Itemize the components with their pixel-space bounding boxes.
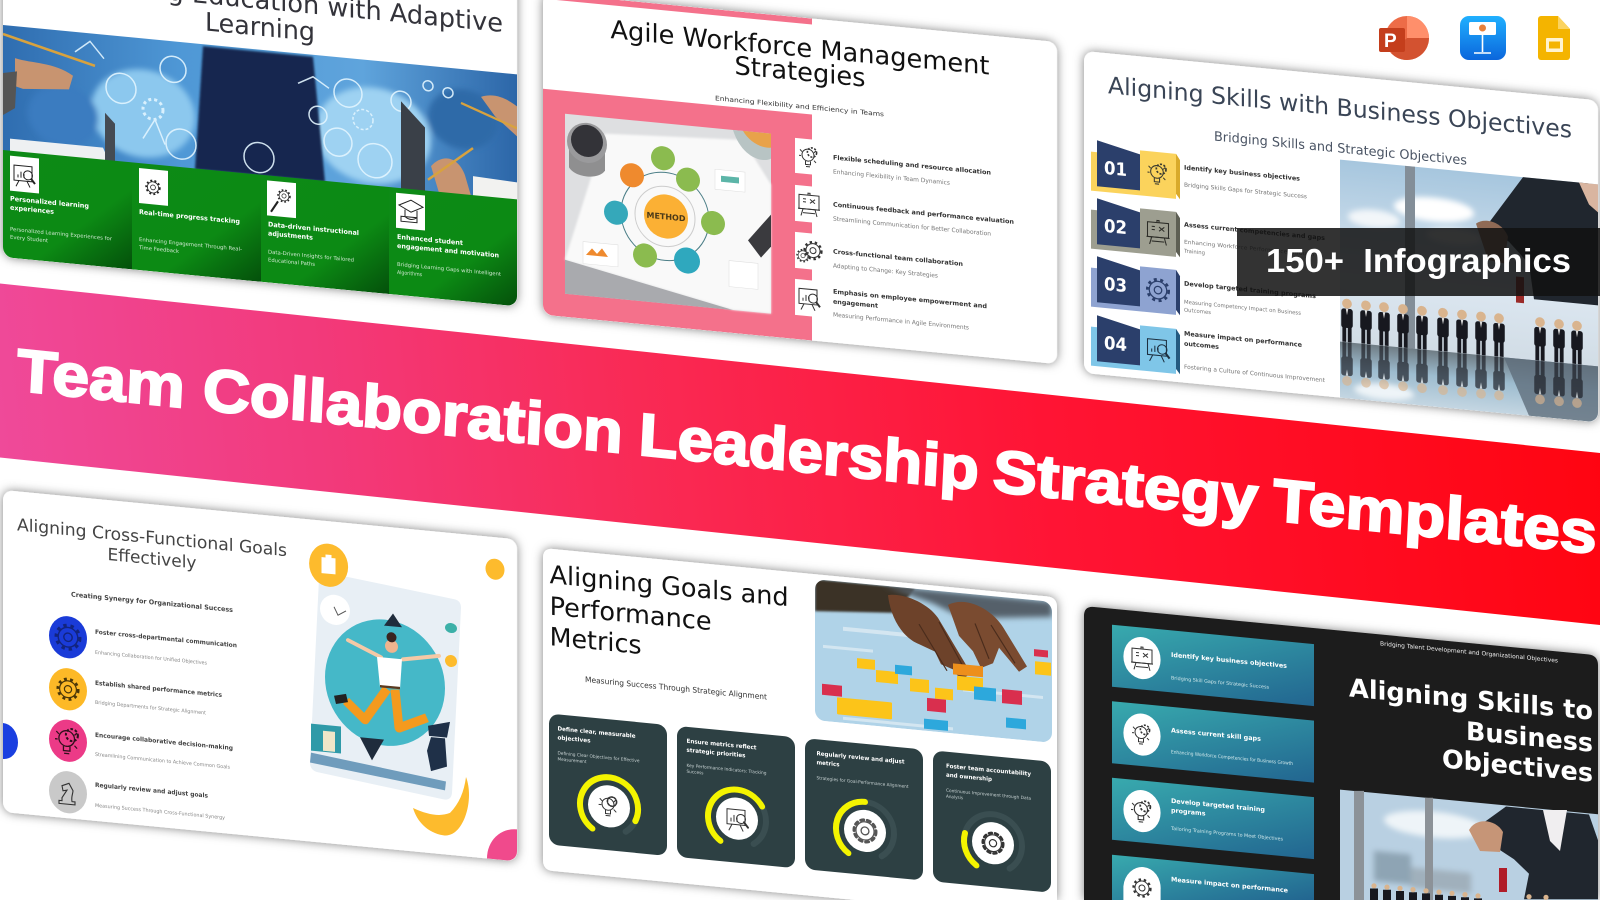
list item: flexible scheduling: Enhancing Flexibility in Team Dynamics <box>833 169 950 187</box>
column: personalized learning <box>3 150 132 269</box>
card: metrics reflect priorities: Ensure metrics reflect <box>686 739 757 752</box>
column: data-driven instructional adjustments: Data-Driven Insights for Tailored <box>268 249 354 264</box>
panel: aligning cross-functional goals slide <box>0 489 547 896</box>
decoration: blue half circle <box>3 723 18 759</box>
card: review metrics: Regularly review and adjust <box>817 751 905 766</box>
card: define objectives: Define clear, measurable <box>558 726 636 740</box>
card: metrics reflect priorities: Success <box>686 769 704 776</box>
slide title: Aligning Skills to <box>1349 673 1593 727</box>
slide title: Effectively <box>107 545 196 574</box>
list item: continuous feedback: Continuous feedback and performance evaluation <box>833 202 1014 226</box>
list item: shared metrics: Bridging Departments for Strategic Alignment <box>95 700 206 716</box>
strip: measure impact <box>1112 855 1314 900</box>
icon: PowerPoint: P <box>1384 31 1397 52</box>
slide title: Strategies <box>734 51 866 94</box>
column: data-driven instructional adjustments <box>261 175 389 294</box>
icon: yellow briefcase badge <box>309 542 348 589</box>
subtitle: Bridging Skills and Strategic Objectives <box>1214 130 1467 169</box>
list item 04 <box>1091 315 1326 388</box>
list item: employee empowerment: Emphasis on employee empowerment and <box>833 289 987 310</box>
photo: hands and holographic learning icons <box>3 25 517 200</box>
card: metrics reflect priorities: strategic priorities <box>686 748 746 759</box>
list item: foster communication: Enhancing Collaboration for Unified Objectives <box>95 650 207 667</box>
column: personalized learning: experiences <box>10 204 54 216</box>
illustration: jumping woman <box>310 571 461 801</box>
panel: aligning skills to business objectives dark slide <box>1084 607 1598 900</box>
subtitle: Enhancing Flexibility and Efficiency in Teams <box>715 94 885 119</box>
main title: Team <box>15 337 187 421</box>
icon: Keynote <box>1460 16 1506 60</box>
list item: collaborative decisions: Streamlining Communication to Achieve Common Goals <box>95 752 230 771</box>
list item: flexible scheduling: Flexible scheduling and resource allocation <box>833 155 991 177</box>
main title: Templates <box>1271 466 1599 567</box>
list item 01: 01 <box>1104 158 1127 181</box>
strip: develop training: Tailoring Training Programs to Meet Objectives <box>1170 826 1283 843</box>
list item 03: Develop targeted training programs <box>1184 280 1316 300</box>
list item: employee empowerment <box>795 279 987 333</box>
list item 03 <box>1091 256 1316 316</box>
list item 01: Identify key business objectives <box>1184 164 1300 183</box>
list item: collaborative decisions: Encourage collaborative decision-making <box>95 732 233 752</box>
card: team accountability: and ownership <box>946 773 992 783</box>
column: enhanced student engagement: engagement and motivation <box>397 242 499 260</box>
list item: employee empowerment: Measuring Performance in Agile Environments <box>833 312 969 332</box>
subtitle: Measuring Success Through Strategic Alignment <box>585 675 767 701</box>
column: enhanced student engagement: Algorithms <box>397 270 422 278</box>
list item 03: 03 <box>1104 274 1127 297</box>
list item 02: Training <box>1183 249 1205 257</box>
card: define objectives: objectives <box>558 735 591 745</box>
strip: assess skill gaps: Assess current skill gaps <box>1171 726 1261 743</box>
list item: employee empowerment: engagement <box>833 299 878 310</box>
card: define objectives: Defining Clear Objectives for Effective <box>558 750 640 764</box>
list item 04: outcomes <box>1184 340 1219 351</box>
list item 02 <box>1091 198 1324 258</box>
top subtitle: Bridging Talent Development and Organizational Objectives <box>1380 641 1558 664</box>
decoration: yellow crescent <box>413 777 469 836</box>
photo: hands arranging sticky notes <box>815 579 1052 743</box>
strip: identify objectives: Identify key business objectives <box>1171 651 1287 670</box>
list item: shared metrics: Establish shared performance metrics <box>95 680 222 699</box>
strip: identify objectives: Bridging Skill Gaps for Strategic Success <box>1171 675 1269 691</box>
photo: business person picking red figure <box>1340 790 1598 900</box>
card: review metrics: metrics <box>817 760 840 769</box>
list item: foster communication <box>49 616 236 665</box>
strip: measure impact: Measure impact on performance <box>1171 875 1289 895</box>
slide title: Agile Workforce Management <box>610 15 989 82</box>
strip: develop training: Develop targeted training <box>1171 797 1265 814</box>
column: enhanced student engagement: Enhanced student <box>397 233 463 247</box>
card: review metrics: Strategies for Goal-Performance Alignment <box>817 775 909 790</box>
panel: agile workforce management slide <box>543 0 1057 364</box>
list item 04: Fostering a Culture of Continuous Improvement <box>1184 365 1326 384</box>
panel: education with adaptive learning slide <box>3 0 517 306</box>
list item: continuous feedback: Streamlining Communication for Better Collaboration <box>833 216 991 238</box>
badge: 150+ infographics: 150+ Infographics <box>1266 242 1571 279</box>
strip: identify objectives <box>1112 625 1314 706</box>
list item: cross-functional collaboration: Adapting to Change: Key Strategies <box>833 263 938 280</box>
strip: assess skill gaps: Enhancing Workforce Competencies for Business Growth <box>1171 749 1293 767</box>
list item: flexible scheduling <box>795 138 990 185</box>
slide title: Learning <box>205 7 315 48</box>
card: team accountability: Analysis <box>946 794 964 801</box>
list item 01 <box>1091 140 1307 200</box>
slide title: Objectives <box>1442 744 1593 789</box>
photo: business person placing figures <box>1340 160 1598 422</box>
list item 04: Measure impact on performance <box>1184 330 1303 349</box>
list item: foster communication: Foster cross-departmental communication <box>95 629 237 649</box>
panel: aligning goals and performance metrics slide <box>543 549 1057 900</box>
list item 01: Bridging Skills Gaps for Strategic Success <box>1184 183 1307 200</box>
main title: Leadership <box>637 401 981 503</box>
column: data-driven instructional adjustments: Educational Paths <box>268 257 315 268</box>
icon: PowerPoint <box>1379 16 1429 60</box>
photo: method flowchart on desk: METHOD <box>647 211 686 223</box>
card: define objectives <box>549 714 667 856</box>
main title: Strategy <box>991 437 1260 532</box>
decoration: pink corner <box>487 829 517 860</box>
list item 03: Outcomes <box>1184 308 1211 316</box>
main title <box>15 337 1599 567</box>
slide title: Aligning Skills with Business Objectives <box>1108 71 1572 144</box>
slide title <box>1349 673 1593 789</box>
list item: cross-functional collaboration: Cross-functional team collaboration <box>833 249 963 268</box>
slide title: Aligning Goals and <box>550 560 789 613</box>
slide title: Performance <box>550 592 712 637</box>
strip: develop training <box>1112 778 1314 859</box>
column: personalized learning: Personalized Learning Experiences for <box>10 227 113 243</box>
list item: review goals: Regularly review and adjust goals <box>95 782 208 800</box>
main title: Collaboration <box>201 356 625 466</box>
column: real-time progress tracking <box>132 162 261 282</box>
strip: develop training: programs <box>1171 806 1206 818</box>
strip: assess skill gaps <box>1112 701 1314 783</box>
card: define objectives: Measurement <box>558 756 587 765</box>
icon: Google Slides <box>1538 16 1570 60</box>
list item: continuous feedback <box>795 185 1014 242</box>
banner: main title ribbon <box>0 284 1600 625</box>
subtitle: Creating Synergy for Organizational Success <box>71 591 233 614</box>
list item: shared metrics <box>49 668 222 714</box>
column: data-driven instructional adjustments: adjustments <box>268 229 313 242</box>
slide title: Business <box>1466 717 1593 759</box>
list item 03: Measuring Competency Impact on Business <box>1184 300 1301 317</box>
pink side panel <box>543 0 812 341</box>
column: enhanced student engagement <box>389 187 517 306</box>
list item 04: 04 <box>1104 333 1127 356</box>
list item 02: Enhancing Workforce Performance Through <box>1184 240 1314 258</box>
slide title: Metrics <box>550 622 642 661</box>
slide title <box>170 0 502 46</box>
column: real-time progress tracking: Real-time progress tracking <box>139 208 240 226</box>
card: metrics reflect priorities: Key Performance Indicators: Tracking <box>686 763 767 776</box>
column: real-time progress tracking: Enhancing Engagement Through Real- <box>139 237 242 253</box>
badge: 150+ infographics <box>1237 228 1600 296</box>
column: enhanced student engagement: Bridging Learning Gaps with Intelligent <box>397 262 501 278</box>
card: team accountability: Foster team accountability <box>946 764 1031 778</box>
slide title <box>550 560 789 675</box>
list item 02: Assess current competencies and gaps <box>1184 221 1325 242</box>
photo: method flowchart on desk <box>565 114 771 314</box>
card: review metrics <box>805 738 923 880</box>
column: personalized learning: Every Student <box>10 235 48 244</box>
card: team accountability: Continuous Improvement through Data <box>946 788 1031 802</box>
column: data-driven instructional adjustments: Data-driven instructional <box>268 220 359 237</box>
list item: review goals: Measuring Success Through Cross-Functional Synergy <box>95 803 225 821</box>
column: real-time progress tracking: Time Feedback <box>138 245 179 255</box>
decoration: yellow dot <box>486 558 504 581</box>
card: metrics reflect priorities <box>677 726 795 868</box>
column: personalized learning: Personalized learning <box>10 195 89 210</box>
panel: aligning skills with business objectives slide <box>1084 51 1598 422</box>
list item 02: 02 <box>1104 216 1127 239</box>
list item: collaborative decisions <box>49 720 232 769</box>
card: team accountability <box>933 750 1051 893</box>
list item: cross-functional collaboration <box>795 232 962 278</box>
list item: review goals <box>49 771 225 820</box>
slide title: Aligning Cross-Functional Goals <box>17 515 287 561</box>
